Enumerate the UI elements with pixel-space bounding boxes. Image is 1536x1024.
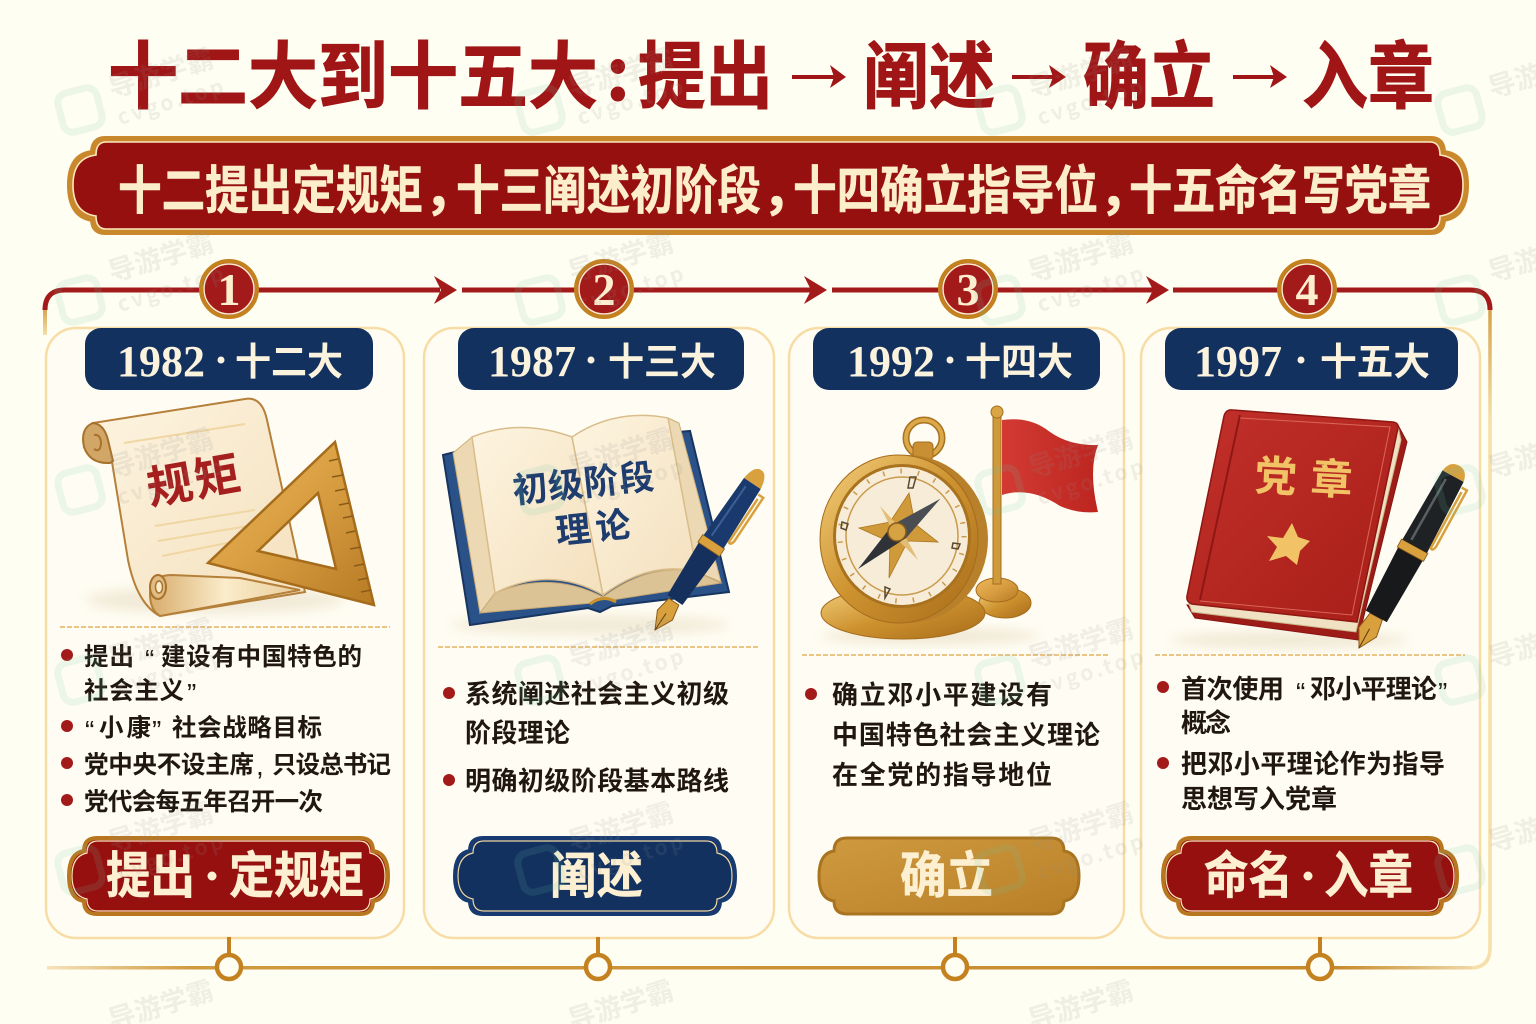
- plaque: name and write into constitution: 入章: [1324, 836, 1413, 908]
- bullet list 4: 邓小平理论: [1310, 669, 1437, 706]
- bullet list 1: 建设有中国特色的: [161, 638, 362, 673]
- watermark pattern: cvgo.top: [113, 450, 230, 512]
- icon: scroll with set square: [83, 399, 374, 616]
- watermark pattern: cvgo.top: [1033, 825, 1150, 887]
- bullet list 1: 党代会每五年召开一次: [84, 783, 323, 818]
- bullet list 1: 社会战略目标: [172, 709, 322, 744]
- watermark pattern: 导游学霸: [1023, 791, 1138, 860]
- bullet list 1: 提出: [84, 638, 134, 673]
- banner: summary slogan: 十二提出定规矩: [118, 149, 423, 224]
- bullet list 4: 概念: [1181, 703, 1231, 740]
- panel: 1992 fourteenth congress: [789, 328, 1124, 938]
- watermark pattern: cvgo.top: [113, 257, 230, 319]
- watermark pattern: 导游学霸: [103, 221, 218, 290]
- bullet list 3: [805, 675, 1100, 792]
- bullet list 3: 在全党的指导地位: [832, 755, 1052, 792]
- icon: scroll with set square: 规矩: [141, 437, 245, 519]
- watermark pattern: cvgo.top: [1033, 70, 1150, 132]
- bullet list 1: 社会主义: [84, 672, 184, 707]
- year pill 1992: 1992: [847, 337, 935, 386]
- watermark pattern: 导游学霸: [103, 791, 218, 860]
- banner: summary slogan: ，: [424, 149, 476, 224]
- year pill 1987: 1987: [488, 337, 576, 386]
- bullet list 1: ,: [256, 750, 264, 781]
- bullet list 1: ”: [152, 715, 161, 746]
- bottom gold timeline with nodes: [47, 937, 1472, 979]
- bullet list 4: [1157, 669, 1447, 816]
- watermark pattern: cvgo.top: [573, 70, 690, 132]
- year pill 1987: 十三大: [608, 331, 716, 386]
- timeline badge 4: 4: [1296, 264, 1318, 315]
- bullet list 3: 确立邓小平建设有: [832, 675, 1052, 712]
- bullet list 1: ”: [187, 678, 196, 709]
- panel: 1982 twelfth congress: [46, 328, 404, 938]
- bullet list 1: 党中央不设主席: [84, 746, 254, 781]
- watermark pattern: 导游学霸: [1023, 607, 1138, 676]
- title: 确立: [1083, 18, 1215, 124]
- divider: [60, 626, 390, 628]
- watermark pattern: cvgo.top: [573, 640, 690, 702]
- watermark pattern: 导游学霸: [563, 791, 678, 860]
- title: [108, 16, 1434, 124]
- watermark pattern: cvgo.top: [573, 257, 690, 319]
- watermark pattern: 导游学霸: [563, 221, 678, 290]
- watermark pattern: cvgo.top: [1033, 450, 1150, 512]
- title: 提出: [638, 18, 773, 124]
- plaque: elaborate: 阐述: [550, 836, 643, 908]
- bullet list 2: 明确初级阶段基本路线: [465, 761, 729, 798]
- plaque: propose and set rules: 提出: [106, 836, 195, 908]
- timeline badge 3: 3: [956, 264, 980, 315]
- banner: summary slogan: 十四确立指导位: [793, 149, 1098, 224]
- watermark pattern: 导游学霸: [103, 417, 218, 486]
- year pill 1987: [458, 328, 744, 390]
- watermark pattern: cvgo.top: [573, 450, 690, 512]
- watermark pattern: cvgo.top: [113, 825, 230, 887]
- watermark pattern: 导游学霸: [1023, 37, 1138, 106]
- watermark pattern: 导游学霸: [103, 37, 218, 106]
- plaque: establish: 确立: [900, 836, 993, 908]
- watermark pattern: cvgo.top: [113, 70, 230, 132]
- icon: compass and red flag: [820, 406, 1098, 644]
- bullet list 1: “: [85, 715, 94, 746]
- divider: [802, 654, 1110, 656]
- bullet list 2: 系统阐述社会主义初级: [465, 674, 729, 711]
- bullet list 1: “: [145, 644, 154, 675]
- bullet list 4: 思想写入党章: [1181, 779, 1337, 816]
- watermark pattern: 导游学霸: [563, 417, 678, 486]
- watermark pattern: cvgo.top: [113, 640, 230, 702]
- year pill 1992: [813, 328, 1100, 390]
- banner: summary slogan: ，: [762, 149, 814, 224]
- timeline badge 3: [940, 261, 996, 317]
- bullet list 4: 把邓小平理论作为指导: [1181, 744, 1445, 781]
- year pill 1997: [1165, 328, 1458, 390]
- year pill 1982: 1982: [117, 337, 205, 386]
- bullet list 2: 阶段理论: [465, 713, 570, 750]
- bullet list 1: [61, 638, 391, 818]
- watermark pattern: 导游学霸: [563, 37, 678, 106]
- banner: summary slogan: [70, 139, 1466, 232]
- divider: [1155, 654, 1465, 656]
- banner: summary slogan: ，: [1099, 149, 1151, 224]
- banner: summary slogan: 十五命名写党章: [1129, 149, 1431, 224]
- banner: summary slogan: 十三阐述初阶段: [456, 149, 761, 224]
- timeline badge 1: 1: [218, 264, 240, 315]
- icon: red party constitution book with black pen: 党章: [1253, 442, 1354, 508]
- watermark pattern: 导游学霸: [1023, 417, 1138, 486]
- title: 十二大到十五大: [108, 18, 598, 124]
- timeline badge 2: [576, 261, 632, 317]
- panel: 1987 thirteenth congress: [424, 328, 775, 938]
- watermark pattern: cvgo.top: [1033, 257, 1150, 319]
- bullet list 4: 首次使用: [1181, 669, 1284, 706]
- plaque: elaborate: [455, 836, 735, 914]
- bullet list 1: 只设总书记: [272, 746, 391, 781]
- year pill 1997: 1997: [1194, 337, 1282, 386]
- bullet list 3: 中国特色社会主义理论: [832, 715, 1100, 752]
- timeline badge 2: 2: [592, 264, 616, 315]
- year pill 1992: 十四大: [965, 331, 1073, 386]
- title: 阐述: [863, 18, 995, 124]
- icon: open book with blue pen: 初级阶段: [510, 448, 656, 514]
- bullet list 1: 小康: [99, 709, 151, 744]
- watermark pattern: 导游学霸: [103, 607, 218, 676]
- year pill 1982: [85, 328, 373, 390]
- plaque: propose and set rules: [69, 836, 388, 914]
- bullet list 2: [443, 674, 729, 798]
- timeline frame: top red line with arrows: [45, 276, 1490, 968]
- watermark pattern: cvgo.top: [573, 825, 690, 887]
- icon: open book with blue pen: 理论: [553, 496, 633, 555]
- icon: open book with blue pen: [443, 415, 775, 639]
- plaque: propose and set rules: 定规矩: [229, 836, 364, 908]
- bullet list 4: ”: [1438, 677, 1447, 708]
- divider: [438, 646, 760, 648]
- watermark pattern: 导游学霸: [563, 607, 678, 676]
- watermark pattern: cvgo.top: [1033, 640, 1150, 702]
- title: :: [606, 16, 630, 122]
- icon: red party constitution book with black pen: [1170, 410, 1476, 657]
- year pill 1982: 十二大: [235, 331, 343, 386]
- title: 入章: [1302, 18, 1434, 124]
- panel: 1997 fifteenth congress: [1141, 328, 1480, 938]
- plaque: name and write into constitution: 命名: [1204, 836, 1293, 908]
- plaque: establish: [819, 836, 1079, 914]
- bullet list 4: “: [1296, 677, 1305, 708]
- plaque: name and write into constitution: [1163, 836, 1457, 914]
- timeline badge 4: [1279, 261, 1335, 317]
- watermark pattern: 导游学霸: [1023, 221, 1138, 290]
- timeline badge 1: [201, 261, 257, 317]
- year pill 1997: 十五大: [1320, 331, 1430, 386]
